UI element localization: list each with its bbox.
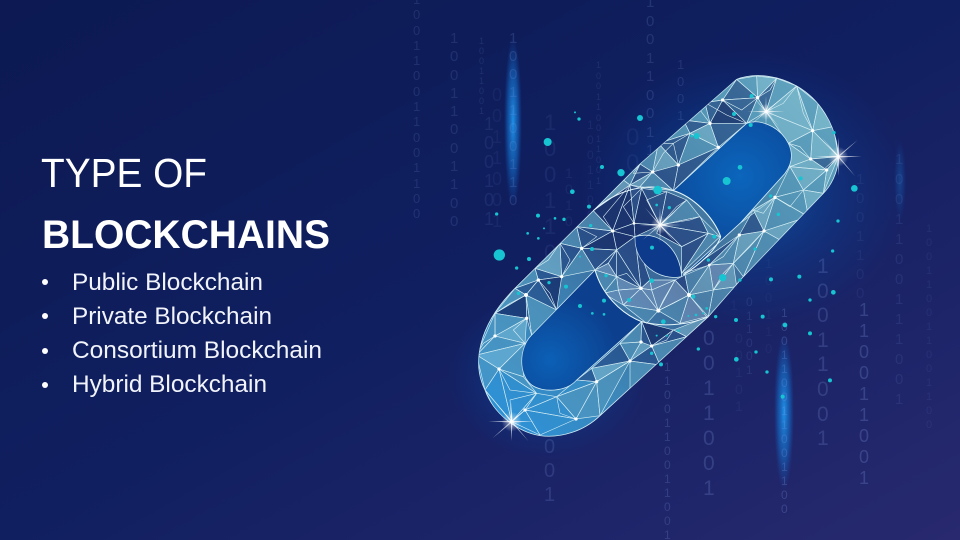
- binary digit rain columns: 1001100: [544, 110, 556, 291]
- low-poly triangle mesh: [477, 76, 838, 435]
- binary digit rain columns: 10011001: [587, 118, 594, 237]
- binary digit rain columns: 011001: [746, 295, 753, 376]
- chain link graphic: [478, 75, 862, 440]
- link hole fills: [522, 122, 792, 390]
- binary digit rain columns: 1001100111001: [895, 151, 903, 408]
- binary digit rain columns: 001: [544, 436, 555, 506]
- binary digit rain columns: 100110011001100: [926, 223, 932, 431]
- binary digit rain columns: 1001100110: [509, 30, 517, 209]
- binary digit rain columns: 100110011001100: [781, 306, 788, 516]
- bullet: Public Blockchain: Public Blockchain: [72, 269, 263, 296]
- bullet: Private Blockchain: Private Blockchain: [72, 303, 272, 330]
- extra mesh lines: [477, 78, 813, 422]
- binary digit rain columns: 1001: [677, 57, 684, 123]
- binary digit rain columns: 100110: [765, 256, 772, 356]
- binary digit rain columns: 0011001: [703, 327, 715, 500]
- cyan particle dots: [494, 94, 858, 399]
- link silhouette band: [479, 76, 838, 436]
- binary digit rain columns: 110011001: [859, 300, 869, 488]
- binary digit rain columns: 00101: [735, 330, 743, 414]
- bullet: Hybrid Blockchain: Hybrid Blockchain: [72, 371, 267, 398]
- binary digit rain columns: 1100110011001: [664, 360, 671, 540]
- sparkle stars: [488, 96, 862, 441]
- binary digit rain columns: 100110011001: [596, 60, 601, 186]
- binary digit rain columns: 1001100: [856, 171, 864, 302]
- overlap arcs between the two links: [593, 187, 721, 325]
- binary digit rain columns: 100101: [484, 114, 494, 229]
- binary digit rain columns: 00: [626, 124, 639, 177]
- binary digit rain columns: 10011001: [479, 36, 484, 116]
- bullet: Consortium Blockchain: Consortium Blockchain: [72, 337, 322, 364]
- white mesh nodes: [493, 96, 828, 421]
- binary digit rain columns: 10011: [546, 281, 557, 403]
- binary digit rain columns: 1010: [565, 165, 573, 229]
- title line 2: BLOCKCHAINS: [42, 213, 330, 257]
- binary digit rain columns: 10011001: [817, 255, 829, 450]
- binary digit rain columns: 1001: [730, 237, 738, 313]
- title line 1: TYPE OF: [41, 150, 207, 196]
- binary digit rain columns: 10011001100: [450, 30, 458, 230]
- binary digit rain columns: 0011001: [492, 85, 502, 231]
